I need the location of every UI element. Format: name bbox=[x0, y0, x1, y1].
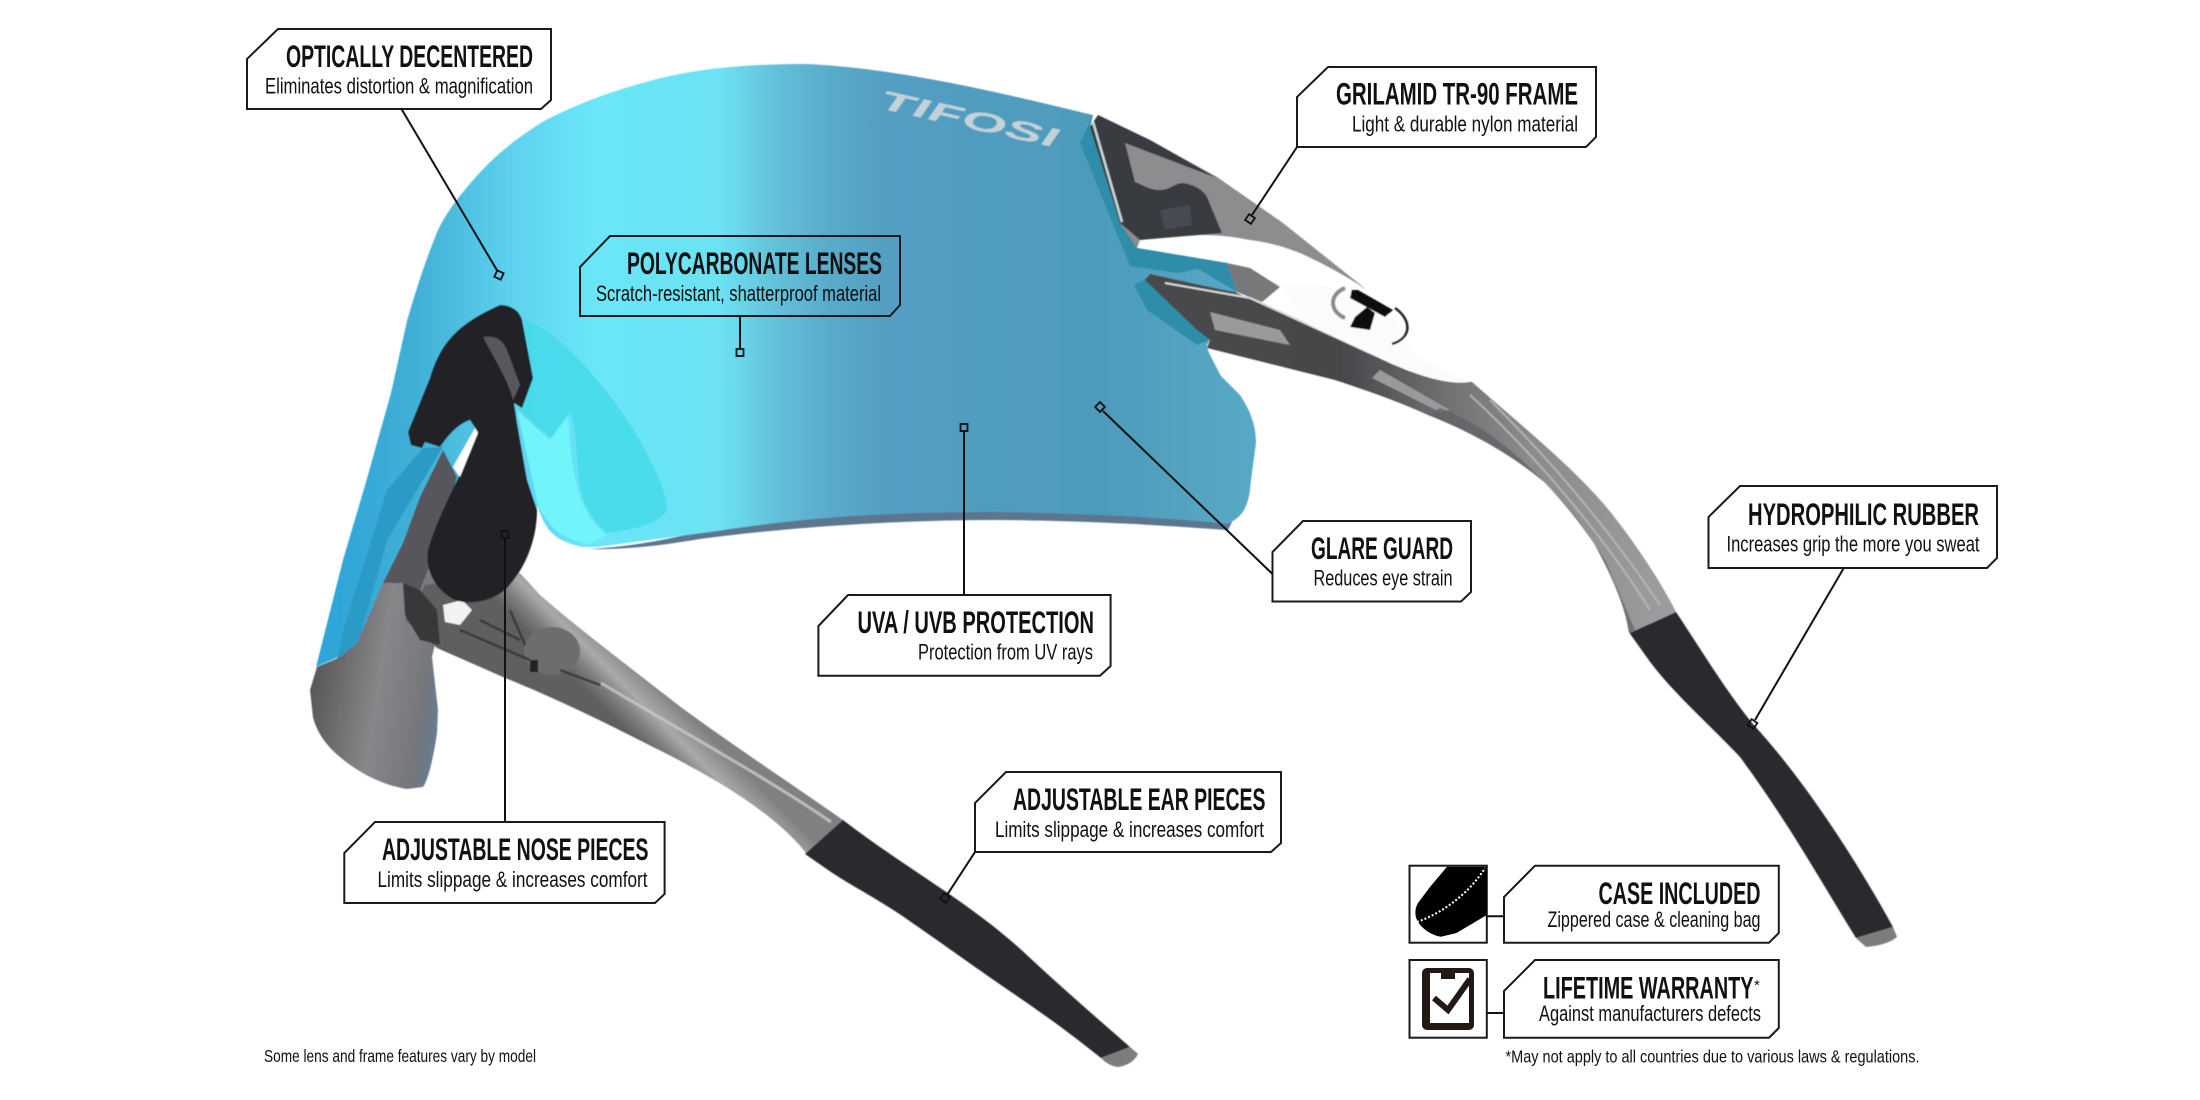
callout: adjustable ear pieces bbox=[940, 772, 1281, 903]
callout: case included: Zippered case & cleaning bag bbox=[1548, 907, 1760, 932]
connector: warranty bbox=[1487, 1012, 1504, 1014]
connector: case bbox=[1487, 915, 1504, 917]
hinge ellipse left arc bbox=[1333, 288, 1345, 318]
callout: glare guard: Reduces eye strain bbox=[1314, 566, 1452, 590]
teal lens section between frame arms bbox=[1134, 252, 1237, 345]
nose pad highlight bbox=[483, 337, 520, 400]
right temple tip bbox=[1856, 927, 1897, 947]
footnote: model features: Some lens and frame features vary by model bbox=[264, 1046, 536, 1066]
white hinge body bbox=[1280, 284, 1470, 383]
callout: uva uvb protection: Protection from UV rays bbox=[918, 640, 1093, 664]
left temple rubber ear piece bbox=[805, 820, 1130, 1058]
callout: uva uvb protection: UVA / UVB PROTECTION bbox=[858, 604, 1094, 640]
callout: glare guard: GLARE GUARD bbox=[1311, 530, 1453, 566]
callout: adjustable ear pieces: Limits slippage & increases comfort bbox=[995, 817, 1265, 842]
hinge highlight bbox=[443, 600, 472, 625]
callout: adjustable ear pieces: ADJUSTABLE EAR PIECES bbox=[1013, 781, 1266, 817]
callout: grilamid frame bbox=[1245, 67, 1596, 224]
hinge fine details bbox=[460, 610, 600, 685]
callout: adjustable nose pieces bbox=[344, 531, 665, 903]
icon: case bbox=[1410, 866, 1487, 943]
callout: hydrophilic rubber: Increases grip the more you sweat bbox=[1726, 532, 1980, 556]
lens left flap strip bbox=[333, 447, 443, 677]
icon: warranty clipboard bbox=[1410, 960, 1487, 1038]
callout: case included bbox=[1504, 866, 1779, 943]
hinge recess bbox=[524, 627, 580, 675]
right temple rubber bbox=[1630, 612, 1893, 938]
right arm and temple bbox=[1145, 274, 1676, 633]
callout: adjustable nose pieces: Limits slippage & increases comfort bbox=[378, 867, 648, 892]
right frame wedge bbox=[1090, 115, 1367, 290]
callout: glare guard bbox=[1095, 402, 1471, 602]
right temple lower shade bbox=[1428, 408, 1635, 633]
frame lens edge highlight bbox=[1093, 122, 1122, 222]
grey lower lens section bbox=[310, 477, 445, 789]
hinge T stem bbox=[1350, 307, 1375, 330]
left temple tip bbox=[1101, 1047, 1138, 1067]
callout: case included: CASE INCLUDED bbox=[1598, 875, 1760, 911]
callout: polycarbonate lenses bbox=[580, 236, 900, 356]
frame inner dark patch bbox=[1160, 205, 1192, 230]
left temple arm bbox=[405, 573, 845, 853]
lens bright area bbox=[517, 410, 607, 544]
callout: grilamid frame: Light & durable nylon material bbox=[1352, 112, 1578, 136]
hinge ellipse right arc bbox=[1392, 308, 1407, 344]
callout: optically decentered: OPTICALLY DECENTERED bbox=[286, 38, 533, 74]
blue mirrored lens bbox=[316, 64, 1256, 667]
callout: optically decentered: Eliminates distortion & magnification bbox=[265, 74, 533, 98]
lens inner tint shape bbox=[517, 320, 667, 533]
callout: polycarbonate lenses: Scratch-resistant, shatterproof material bbox=[596, 281, 881, 306]
callout: uva uvb protection bbox=[818, 424, 1111, 676]
grey section behind hinge bbox=[1227, 263, 1280, 302]
nose piece slot bbox=[453, 428, 478, 477]
right arm light bands bbox=[1210, 312, 1450, 412]
callout: lifetime warranty: Against manufacturers defects bbox=[1539, 1001, 1761, 1026]
teal shadow near frame bbox=[1080, 115, 1227, 273]
hinge mechanism left bbox=[403, 583, 440, 645]
right temple highlights bbox=[1470, 395, 1660, 610]
callout: hydrophilic rubber bbox=[1708, 486, 1997, 729]
callout: lifetime warranty: * bbox=[1754, 977, 1760, 994]
hinge T bar bbox=[1350, 290, 1393, 317]
frame top dark band bbox=[1090, 115, 1222, 240]
dark inner area behind nose piece bbox=[383, 450, 457, 590]
TIFOSI logo: TIFOSI bbox=[877, 85, 1062, 154]
left temple highlight bbox=[601, 683, 831, 822]
left temple small clip bbox=[530, 660, 538, 672]
callout: hydrophilic rubber: HYDROPHILIC RUBBER bbox=[1748, 496, 1979, 532]
callout: grilamid frame: GRILAMID TR-90 FRAME bbox=[1336, 76, 1578, 112]
callout: polycarbonate lenses: POLYCARBONATE LENSES bbox=[627, 245, 882, 281]
hinge logo bbox=[1333, 288, 1407, 344]
right arm highlight line bbox=[1165, 283, 1370, 353]
callout: adjustable nose pieces: ADJUSTABLE NOSE PIECES bbox=[382, 831, 648, 867]
footnote: warranty: *May not apply to all countries due to various laws & regulations. bbox=[1506, 1046, 1920, 1066]
callout: lifetime warranty bbox=[1504, 960, 1779, 1038]
callout: optically decentered bbox=[247, 29, 551, 280]
callout: lifetime warranty: LIFETIME WARRANTY bbox=[1543, 970, 1754, 1006]
illustration: sunglasses bbox=[310, 64, 1897, 1067]
nose piece bbox=[408, 305, 537, 602]
lens bottom edge bbox=[590, 511, 1232, 549]
